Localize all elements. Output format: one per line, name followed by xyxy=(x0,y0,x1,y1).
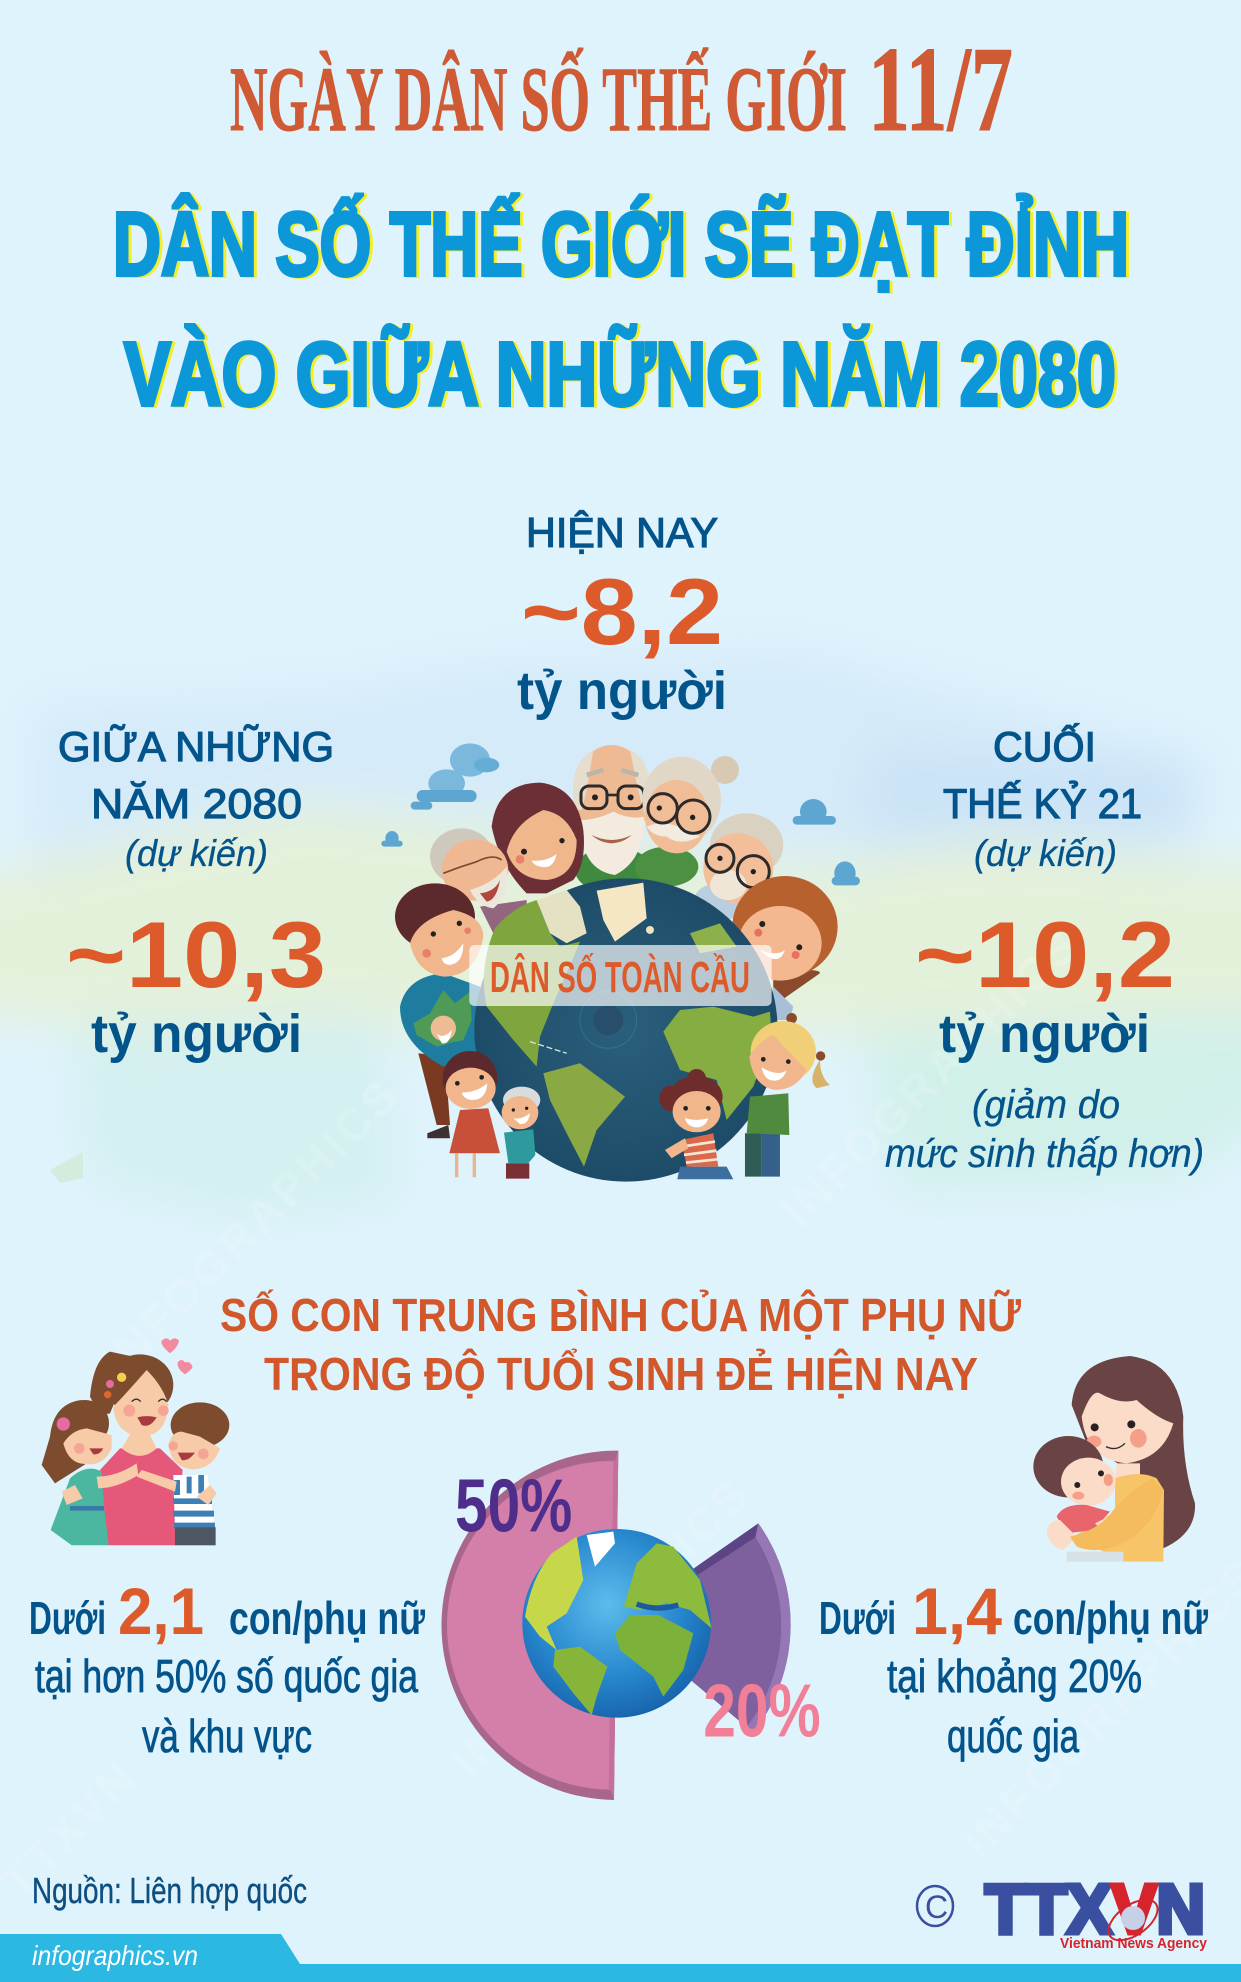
icon: mother holding baby xyxy=(1033,1356,1195,1562)
girl with hair bun xyxy=(659,1069,733,1179)
stat: mid 2080s: ~10,3 xyxy=(66,902,326,1007)
stat: mid 2080s: tỷ người xyxy=(91,1004,302,1064)
pie slice: 50% xyxy=(441,1451,618,1800)
text block: under 2.1 children: con/phụ nữ xyxy=(229,1592,426,1644)
stat: end of 21st century: THẾ KỶ 21 xyxy=(943,779,1142,827)
banner: global population xyxy=(469,945,772,1006)
text block: under 2.1 children: Dưới xyxy=(29,1592,106,1644)
hearts xyxy=(161,1338,193,1374)
section heading: average children per woman: TRONG ĐỘ TUỔI SINH ĐẺ HIỆN NAY xyxy=(264,1348,978,1400)
illustration: family around the globe xyxy=(381,743,860,1182)
pie chart with globe xyxy=(441,1451,821,1800)
stat: current population xyxy=(517,509,727,721)
woman with orange hair xyxy=(732,876,838,1020)
girl xyxy=(42,1400,87,1483)
text block: under 1.4 children: quốc gia xyxy=(947,1710,1079,1762)
title: world population day xyxy=(230,22,1013,157)
text block: under 2.1 children: và khu vực xyxy=(142,1710,312,1762)
stat: end of 21st century: (giảm do xyxy=(972,1083,1120,1127)
woman with long dark hair xyxy=(492,783,584,893)
globe icon xyxy=(522,1529,712,1718)
icon: copyright: C xyxy=(925,1889,948,1925)
footer bar: infographics.vn xyxy=(32,1940,198,1971)
grandfather left xyxy=(430,828,527,940)
girl in red dress xyxy=(443,1051,500,1177)
text block: under 1.4 children xyxy=(819,1574,1209,1762)
stat: end of 21st century: tỷ người xyxy=(939,1004,1150,1064)
banner: global population: DÂN SỐ TOÀN CẦU xyxy=(490,953,750,1002)
grandfather top center xyxy=(573,745,652,893)
section heading: average children per woman xyxy=(220,1289,1022,1400)
stat: current population: tỷ người xyxy=(517,661,727,721)
boy xyxy=(173,1475,215,1530)
stat: mid 2080s xyxy=(58,723,334,1064)
stat: mid 2080s: NĂM 2080 xyxy=(91,780,302,827)
watermarks: INFOGRAPHICS xyxy=(440,1467,760,1787)
stat: end of 21st century: mức sinh thấp hơn) xyxy=(885,1132,1204,1176)
text block: under 1.4 children: Dưới xyxy=(819,1592,896,1644)
text block: under 1.4 children: 1,4 xyxy=(912,1574,1002,1648)
pie slice: 20% xyxy=(687,1523,791,1733)
child with leaves xyxy=(413,990,477,1063)
stat: mid 2080s: (dự kiến) xyxy=(125,833,268,874)
logo: TTXVN: TTXVN xyxy=(985,1870,1205,1948)
text block: under 2.1 children: 2,1 xyxy=(118,1574,204,1648)
icon: mother with two children xyxy=(42,1338,229,1545)
globe xyxy=(474,878,778,1182)
text block: under 1.4 children: tại khoảng 20% xyxy=(887,1650,1142,1702)
wash patch xyxy=(50,1152,83,1183)
background watercolor wash xyxy=(0,650,1241,1218)
stat: end of 21st century: ~10,2 xyxy=(915,902,1175,1007)
stat: end of 21st century xyxy=(885,722,1204,1176)
main heading xyxy=(113,193,1129,425)
stat: end of 21st century: CUỐI xyxy=(993,722,1096,770)
boy in teal shirt xyxy=(502,1087,540,1179)
grandfather right xyxy=(693,813,783,923)
section heading: average children per woman: SỐ CON TRUNG BÌNH CỦA MỘT PHỤ NỮ xyxy=(220,1289,1022,1341)
icon: clouds xyxy=(381,743,860,885)
mother with sweater xyxy=(395,883,483,1138)
footer bar xyxy=(0,1934,1241,1982)
logo: TTXVN: Vietnam News Agency xyxy=(1060,1935,1208,1952)
watermarks: INFOGRAPHICS xyxy=(770,917,1090,1237)
blond child xyxy=(745,1013,830,1177)
label: 20%: 20% xyxy=(703,1669,821,1753)
text block: under 2.1 children xyxy=(29,1574,426,1762)
grandmother top right xyxy=(635,756,739,887)
source: Nguồn: Liên hợp quốc xyxy=(32,1870,307,1911)
stat: current population: HIỆN NAY xyxy=(526,509,718,556)
stat: mid 2080s: GIỮA NHỮNG xyxy=(58,723,334,770)
watermarks: INFOGRAPHICS xyxy=(90,1067,410,1387)
title: world population day: 11/7 xyxy=(868,22,1013,157)
label: 50%: 50% xyxy=(455,1464,572,1548)
stat: end of 21st century: (dự kiến) xyxy=(974,833,1117,874)
baby xyxy=(1073,1474,1164,1562)
text block: under 2.1 children: tại hơn 50% số quốc gia xyxy=(35,1650,418,1702)
icon: copyright xyxy=(917,1886,953,1926)
stat: current population: ~8,2 xyxy=(521,559,723,664)
watermarks xyxy=(0,917,1241,1907)
